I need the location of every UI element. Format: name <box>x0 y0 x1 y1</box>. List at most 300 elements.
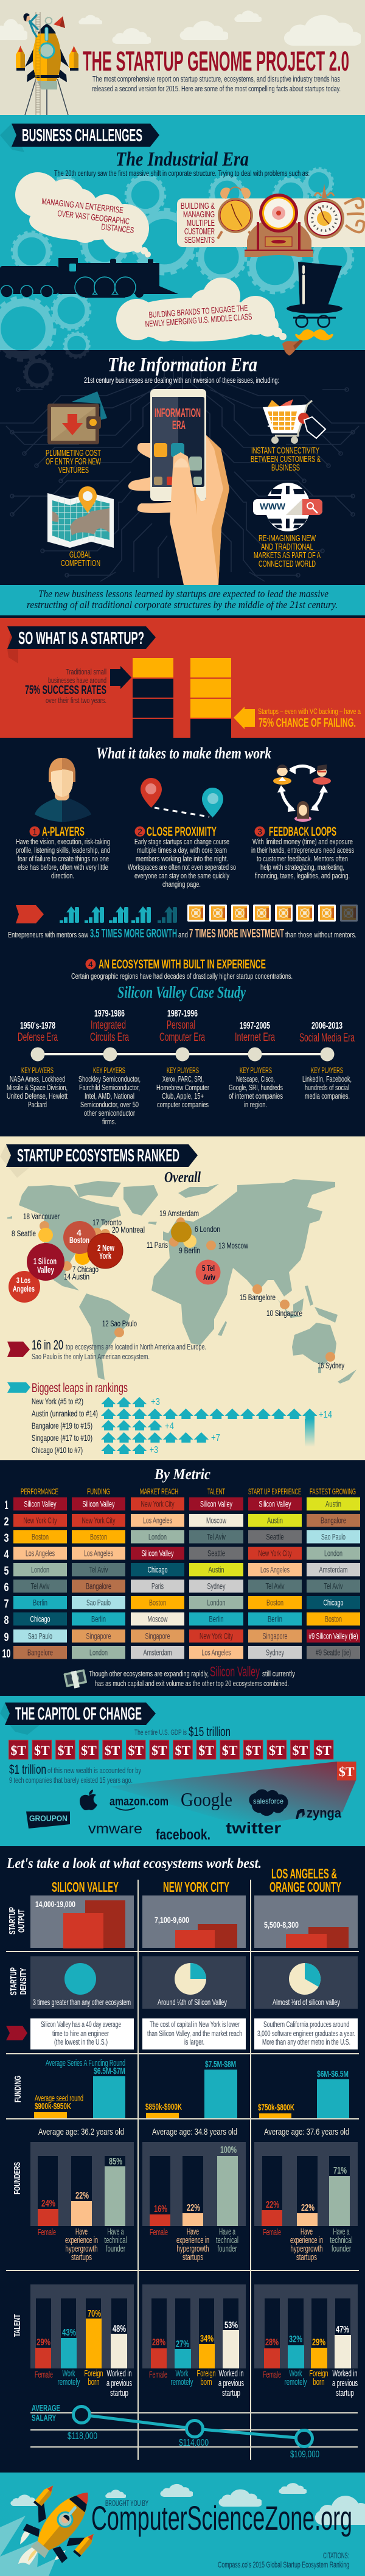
chart: silicon valley funding: Average Series A Funding Round <box>46 2058 125 2068</box>
key players: internet era: in region. <box>244 1100 267 1109</box>
table column: market reach: Singapore <box>145 1631 170 1641</box>
icon: globe with www search bar <box>253 483 322 531</box>
table column: funding: Sao Paulo <box>86 1597 111 1607</box>
chart: new york talent: 34% <box>200 2334 214 2344</box>
callout cloud: building brands: NEWLY EMERGING U.S. MIDDLE CLASS <box>145 312 252 329</box>
text: plummeting cost <box>46 448 102 475</box>
callout cloud: managing an enterprise: DISTANCES <box>101 222 134 235</box>
row label: founders: FOUNDERS <box>12 2162 23 2194</box>
banner: startup ecosystems ranked: STARTUP ECOSYSTEMS RANKED <box>17 1146 179 1166</box>
panel: silicon valley fact <box>30 2018 134 2049</box>
chart: silicon valley founders: 85% <box>109 2157 122 2167</box>
table column: start up experience: Sydney <box>266 1647 284 1657</box>
row label: startup output <box>7 1907 27 1934</box>
chart: los angeles talent: 29% <box>312 2337 325 2348</box>
heading: the information era <box>84 354 279 385</box>
key players: personal computer era <box>156 1065 209 1109</box>
table column: talent: London <box>207 1597 225 1607</box>
chart: los angeles talent: born <box>313 2377 325 2387</box>
heading: biggest leaps <box>7 1381 128 1395</box>
logo: facebook: facebook. <box>156 1827 210 1843</box>
chart: new york funding <box>145 2059 237 2118</box>
timeline era: personal computer: Computer Era <box>159 1031 205 1044</box>
chart: los angeles talent: 28% <box>265 2337 279 2348</box>
chart: silicon valley talent: 29% <box>36 2337 50 2348</box>
key players: integrated circuits era: Semiconductor, over 50 <box>80 1100 139 1109</box>
leap row: new york: New York (#5 to #2) <box>32 1396 83 1406</box>
map labels <box>12 1208 344 1370</box>
chart: new york founders: Have <box>187 2227 199 2237</box>
map labels: 15 Bangelore <box>240 1292 276 1302</box>
arrow: to traditional blocks <box>110 666 131 689</box>
table column: funding: Singapore <box>86 1631 111 1641</box>
icon: wallet with falling cost arrow <box>47 391 107 444</box>
table column: start up experience: Boston <box>266 1597 283 1607</box>
text: traditional small business success: businesses have around <box>48 676 106 685</box>
table column: market reach: Paris <box>151 1581 164 1591</box>
text: one trillion: 9 tech companies that barely existed 15 years ago. <box>9 1776 133 1785</box>
column: close proximity: CLOSE PROXIMITY <box>147 825 217 839</box>
footer credit: BROUGHT YOU BY <box>105 2498 148 2508</box>
chart: los angeles founders: Female <box>263 2227 281 2238</box>
row label: startup density: STARTUP <box>9 1967 19 1995</box>
panel: new york fact: is larger. <box>184 2037 204 2046</box>
top five bubble labels: Valley <box>37 1265 54 1275</box>
map labels: 16 Sydney <box>318 1360 344 1370</box>
top five bubble labels: Angeles <box>13 1284 35 1293</box>
timeline era: internet: 1997-2005 <box>240 1021 270 1031</box>
chart: los angeles founders <box>254 2142 358 2263</box>
table column: funding: Silicon Valley <box>83 1499 114 1508</box>
text: re-imagining new and traditional markets: CONNECTED WORLD <box>259 559 316 569</box>
highlighted trillion square <box>337 1762 356 1780</box>
chart: silicon valley funding: $6.5M-$7M <box>94 2066 125 2076</box>
heading: ecosystem with built in experience: 4 <box>88 959 93 969</box>
map labels: 8 Seattle <box>12 1228 36 1238</box>
table row numbers: 7 <box>4 1598 9 1611</box>
top five bubble labels: 3 Los <box>16 1275 30 1285</box>
chart: los angeles founders: 22% <box>266 2200 279 2210</box>
column: a-players: profile, listening skills, leadership, and <box>16 845 110 855</box>
table column: market reach: Silicon Valley <box>141 1549 174 1558</box>
logo: zynga: zynga <box>307 1805 342 1821</box>
banner: so what is a startup: SO WHAT IS A STARTUP? <box>18 629 144 648</box>
text: global competition <box>61 550 100 569</box>
key players: internet era: of internet companies <box>229 1091 283 1101</box>
table column: performance: Tel Aviv <box>30 1581 50 1591</box>
table column: start up experience: Seattle <box>266 1531 284 1541</box>
column heading: silicon valley: SILICON VALLEY <box>52 1879 119 1895</box>
table column: fastest growing: Austin <box>325 1499 341 1508</box>
panel: silicon valley fact: time to hire an engineer <box>52 2029 109 2038</box>
map labels: 17 Toronto <box>92 1217 122 1227</box>
chart: silicon valley talent: Worked in <box>107 2368 131 2379</box>
text: mentors stat: and <box>178 930 188 939</box>
chart: new york founders <box>142 2142 246 2263</box>
map city bubbles <box>9 1217 335 1362</box>
table row numbers: 6 <box>4 1581 9 1594</box>
callout cloud: managing an enterprise: MANAGING AN ENTERPRISE <box>41 196 124 215</box>
column: a-players: else has before, often with very little <box>18 863 108 872</box>
panel: los angeles fact <box>254 2018 358 2049</box>
key players: defense era: KEY PLAYERS <box>21 1065 54 1075</box>
row label: startup output: OUTPUT <box>16 1909 27 1933</box>
timeline era: integrated circuits <box>90 1009 129 1044</box>
panel: new york fact: than Silicon Valley, and the market reach <box>147 2029 242 2038</box>
top five bubble labels: 2 New <box>97 1243 114 1253</box>
leap row: austin: +14 <box>319 1410 332 1420</box>
banner: the capitol of change: THE CAPITOL OF CHANGE <box>15 1704 142 1724</box>
chart: silicon valley founders: hypergrowth <box>66 2244 97 2254</box>
chart: los angeles talent: 47% <box>336 2325 349 2335</box>
icon: close proximity pins <box>141 778 223 817</box>
chart: silicon valley output <box>30 1895 134 1948</box>
map labels: 6 London <box>195 1224 220 1234</box>
chart: new york founders: founder <box>218 2244 237 2254</box>
text: mentors stat: Entrepreneurs with mentors saw <box>8 930 88 939</box>
callout cloud: managing an enterprise <box>15 172 151 257</box>
chart: silicon valley talent <box>30 2284 134 2398</box>
callout: 16 in 20: top ecosystems are located in North America and Europe. <box>66 1342 206 1351</box>
table row numbers: 9 <box>4 1631 9 1644</box>
chart: new york talent: born <box>201 2377 212 2387</box>
row label: funding: FUNDING <box>13 2076 23 2102</box>
map labels: 11 Paris <box>147 1240 168 1250</box>
logo: groupon: GROUPON <box>29 1814 68 1823</box>
column: close proximity: 2 <box>137 827 142 836</box>
panel: new york fact: The cost of capital in New York is lower <box>150 2020 240 2029</box>
top five bubble labels: 4 <box>77 1228 82 1237</box>
logo: salesforce: salesforce <box>253 1797 283 1805</box>
table column: market reach: Boston <box>149 1597 166 1607</box>
table column: performance <box>13 1497 67 1659</box>
table column: market reach: New York City <box>141 1499 174 1508</box>
table row numbers: 10 <box>2 1648 11 1661</box>
chart: silicon valley talent: 70% <box>88 2309 101 2319</box>
chart: silicon valley talent: Work <box>62 2368 75 2379</box>
map heading: overall: Overall <box>164 1169 201 1186</box>
world map <box>7 1179 356 1384</box>
timeline era: defense: Defense Era <box>18 1031 58 1044</box>
key players: personal computer era: Club, Apple, 15+ <box>162 1091 204 1101</box>
chart: los angeles founders: founder <box>332 2244 351 2254</box>
arrow: to startup blocks <box>234 707 255 729</box>
table column: start up experience: Tel Aviv <box>265 1581 285 1591</box>
timeline era: personal computer <box>159 1009 205 1044</box>
chart: silicon valley output: 14,000-19,000 <box>35 1899 75 1909</box>
panel: silicon valley fact: (the lowest in the U.S.) <box>54 2037 108 2046</box>
logo: google: Google <box>181 1788 232 1810</box>
key players: integrated circuits era <box>78 1065 141 1126</box>
text: re-imagining new and traditional markets: AND TRADITIONAL <box>261 542 313 552</box>
heading: silicon valley case study: Silicon Valley Case Study <box>117 983 246 1001</box>
map labels: 18 Vancouver <box>23 1211 60 1221</box>
callout cloud: building brands: BUILDING BRANDS TO ENGAGE THE <box>148 303 248 320</box>
chart: new york founders: hypergrowth <box>176 2244 209 2254</box>
chart: new york output: 7,100-9,600 <box>155 1915 189 1925</box>
icon: money stack <box>63 1669 88 1689</box>
chart: new york talent: 53% <box>224 2320 238 2331</box>
callout: 16 in 20: Sao Paulo is the only Latin American ecosystem. <box>32 1352 150 1361</box>
table column: fastest growing: London <box>324 1549 342 1558</box>
leap row: austin <box>32 1409 332 1447</box>
chart: new york founders: Female <box>150 2227 168 2238</box>
callout cloud: building brands <box>116 278 287 341</box>
row label: startup density <box>9 1967 29 1995</box>
leap row: singapore: Singapore (#17 to #10) <box>32 1433 92 1443</box>
logo: amazon: amazon.com <box>109 1795 169 1808</box>
heading: biggest leaps: Biggest leaps in rankings <box>32 1381 128 1395</box>
chart: los angeles output <box>254 1895 358 1948</box>
panel: silicon valley density: 3 times greater than any other ecosystem <box>33 1997 131 2007</box>
key players: integrated circuits era: Intel, AMD, National <box>85 1091 134 1101</box>
top five bubble labels: Boston <box>69 1235 89 1245</box>
chart: los angeles founders: 22% <box>301 2203 315 2213</box>
column: a-players: Have the vision, execution, risk-taking <box>16 837 110 846</box>
map labels: 19 Amsterdam <box>159 1208 199 1218</box>
column: feedback loops: 3 <box>257 827 262 836</box>
wedge from highlighted square to logos <box>109 1762 356 1826</box>
table column: performance: Bangelore <box>27 1647 53 1657</box>
chart: new york founders: Have a <box>219 2227 236 2237</box>
table column: fastest growing: Tel Aviv <box>324 1581 343 1591</box>
column: close proximity: multiple times a day, with core team <box>137 845 227 855</box>
chart: new york founders: 100% <box>220 2145 237 2155</box>
table column headers <box>21 1486 356 1496</box>
banner: business challenges <box>0 124 159 152</box>
key players: internet era: KEY PLAYERS <box>240 1065 272 1075</box>
table column: talent: Tel Aviv <box>207 1531 226 1541</box>
map labels: 7 Chicago <box>72 1264 99 1274</box>
heading: by metric: By Metric <box>154 1466 210 1483</box>
chart: silicon valley funding <box>34 2058 125 2118</box>
table column: start up experience: New York City <box>258 1549 292 1558</box>
chart: los angeles talent: remotely <box>285 2377 307 2387</box>
table column: talent: Seattle <box>207 1549 225 1558</box>
chart: new york founders: startups <box>182 2253 203 2263</box>
table column: market reach: London <box>148 1531 167 1541</box>
chart: silicon valley founders: Have <box>75 2227 88 2237</box>
table column: performance: Los Angeles <box>26 1549 55 1558</box>
band text: new business lessons <box>27 588 338 611</box>
map labels: 12 Sao Paulo <box>102 1318 137 1328</box>
table column: fastest growing: Bangalore <box>321 1516 346 1525</box>
chart: silicon valley talent: 48% <box>113 2324 126 2334</box>
icon: top hat, glasses, moustache and pipe <box>282 262 342 355</box>
text: us gdp: $15 trillion <box>189 1725 231 1739</box>
footer clouds <box>10 2483 365 2525</box>
text: silicon valley capital: still currently <box>262 1669 295 1678</box>
table column: performance: London <box>31 1564 49 1574</box>
leap row: singapore: +7 <box>211 1433 220 1443</box>
chart: new york founders: technical <box>216 2236 238 2245</box>
chart: new york founders: experience in <box>176 2236 209 2245</box>
timeline era: personal computer: 1987-1996 <box>167 1009 198 1019</box>
panel: new york density <box>142 1956 246 2009</box>
table column: talent: Austin <box>208 1564 224 1574</box>
table column: funding: Boston <box>90 1531 107 1541</box>
chart: silicon valley talent: a previous <box>106 2378 132 2389</box>
chart: silicon valley talent: remotely <box>57 2377 80 2387</box>
text: average founder ages <box>38 2127 349 2137</box>
callout cloud: managing an enterprise: OVER VAST GEOGRAPHIC <box>57 208 130 226</box>
leap row: bangalore: Bangalore (#19 to #15) <box>32 1421 92 1430</box>
table column: performance: Chicago <box>30 1614 50 1624</box>
table column: market reach: Moscow <box>147 1614 168 1624</box>
table column: start up experience: Los Angeles <box>260 1564 290 1574</box>
text: traditional small business success: over their first two years. <box>46 696 106 705</box>
text: one trillion: $1 trillion <box>9 1763 46 1777</box>
top five bubble labels: 1 Silicon <box>33 1256 57 1267</box>
leap row: chicago <box>32 1444 158 1455</box>
leap row: chicago: +3 <box>150 1445 158 1455</box>
chart: silicon valley founders <box>30 2142 134 2263</box>
panel: building and managing customer segments: BUILDING & <box>181 201 215 211</box>
chart: los angeles founders: Have a <box>333 2227 350 2237</box>
key players: integrated circuits era: other semiconductor <box>84 1108 135 1118</box>
citations <box>218 2550 349 2569</box>
table column: performance: Silicon Valley <box>24 1499 56 1508</box>
banner: business challenges: BUSINESS CHALLENGES <box>22 126 142 145</box>
timeline era: integrated circuits: Circuits Era <box>90 1031 129 1044</box>
chart: new york talent: a previous <box>218 2378 244 2389</box>
text: us gdp: The entire U.S. GDP is <box>134 1728 187 1737</box>
chart: los angeles talent: Foreign <box>309 2368 328 2379</box>
logo: salesforce <box>249 1790 288 1816</box>
table column: funding: Tel Aviv <box>89 1564 108 1574</box>
column: a-players: direction. <box>51 871 74 880</box>
logo: twitter: twitter <box>226 1819 281 1837</box>
text: startup failure <box>258 707 361 730</box>
table column: talent <box>189 1497 243 1659</box>
table column headers: TALENT <box>207 1486 225 1496</box>
text: instant connectivity: BETWEEN CUSTOMERS & <box>251 454 321 464</box>
table column: market reach: Los Angeles <box>143 1516 172 1525</box>
chart: new york talent: Worked in <box>219 2368 243 2379</box>
chart: silicon valley founders: Female <box>38 2227 56 2238</box>
table column: performance: Boston <box>32 1531 49 1541</box>
banner: startup ecosystems ranked <box>0 1144 198 1178</box>
leap row: bangalore <box>32 1420 174 1432</box>
key players: personal computer era: Homebrew Computer <box>156 1083 209 1092</box>
icon: alarm clock <box>218 187 253 239</box>
table column: start up experience: Berlin <box>268 1614 282 1624</box>
column: feedback loops <box>251 825 354 880</box>
timeline era: defense: 1950's-1978 <box>20 1021 55 1031</box>
key players: defense era: United Defense, Hewlett <box>7 1091 68 1101</box>
text: silicon valley capital: Though other ecosystems are expanding rapidly, <box>89 1669 209 1678</box>
table column: funding: Berlin <box>91 1614 106 1624</box>
text: instant connectivity: BUSINESS <box>271 463 300 473</box>
table column: fastest growing: Chicago <box>324 1597 344 1607</box>
text: global competition: GLOBAL <box>69 550 91 560</box>
table column: talent: New York City <box>200 1631 233 1641</box>
leap row: singapore <box>32 1432 220 1443</box>
column: close proximity: members working late into the night. <box>136 854 228 863</box>
chart: new york talent: Work <box>175 2368 189 2379</box>
chart: los angeles talent: 32% <box>289 2334 302 2345</box>
logo: apple <box>80 1790 97 1810</box>
band text: new business lessons: The new business lessons learned by startups are expected to lead the massive <box>38 588 328 600</box>
chart: average salary line: $114,000 <box>179 2438 209 2448</box>
arrow: chevron for facts row <box>6 2026 27 2040</box>
table row numbers: 8 <box>4 1614 9 1627</box>
chart: average salary line: AVERAGE <box>32 2403 60 2413</box>
panel: silicon valley fact: Silicon Valley has a 40 day average <box>41 2020 121 2029</box>
panel: silicon valley density <box>30 1956 134 2009</box>
chart: los angeles talent <box>254 2284 358 2398</box>
icon: globe with www search bar: WWW <box>260 502 286 512</box>
key players: internet era <box>229 1065 283 1109</box>
map labels: 10 Singapore <box>266 1308 302 1318</box>
timeline era: social media <box>299 1021 355 1045</box>
chart: new york talent: Female <box>149 2370 167 2380</box>
comparison grid lines <box>6 1880 359 2460</box>
chart: los angeles talent: startup <box>336 2388 354 2398</box>
key players: defense era: Missile & Space Division, <box>7 1083 68 1092</box>
leap row: bangalore: +4 <box>165 1421 174 1432</box>
arrow: mentors chevron <box>16 905 44 923</box>
leap row: new york <box>32 1396 160 1407</box>
chart: new york talent: 27% <box>176 2339 189 2350</box>
banner: the capitol of change <box>0 1703 156 1735</box>
text: global competition: COMPETITION <box>61 558 100 569</box>
banner: so what is a startup <box>7 626 156 663</box>
table column: funding: Los Angeles <box>84 1549 113 1558</box>
table column: performance: Berlin <box>33 1597 47 1607</box>
chart: new york talent: 28% <box>152 2337 165 2348</box>
chart: silicon valley founders: experience in <box>65 2236 98 2245</box>
key players: integrated circuits era: KEY PLAYERS <box>93 1065 125 1075</box>
chart: average salary line <box>30 2403 358 2460</box>
row label: talent: TALENT <box>12 2314 23 2337</box>
column: close proximity <box>128 825 236 889</box>
heading: the industrial era <box>54 149 310 178</box>
chart: silicon valley talent: born <box>88 2377 100 2387</box>
timeline <box>30 1047 335 1062</box>
table column: talent: Moscow <box>206 1516 227 1525</box>
table column headers: MARKET REACH <box>140 1486 178 1496</box>
icon: rocket on launch pad <box>16 12 78 115</box>
highlighted trillion square: $T <box>339 1764 355 1779</box>
table row numbers: 2 <box>4 1516 9 1528</box>
logo: vmware: vmware <box>88 1821 142 1836</box>
icon: hand holding smartphone: INFORMATION <box>155 407 201 420</box>
timeline era: social media: 2006-2013 <box>311 1021 342 1031</box>
leap row: chicago: Chicago (#10 to #7) <box>32 1445 83 1455</box>
table row numbers: 5 <box>4 1565 9 1578</box>
chart: los angeles funding: $6M-$6.5M <box>317 2069 349 2079</box>
text: instant connectivity <box>251 446 321 473</box>
table column: fastest growing: Sao Paulo <box>321 1531 346 1541</box>
chart: silicon valley funding: Average seed round <box>35 2093 83 2104</box>
heading: what ecosystems work best: Let's take a look at what ecosystems work best. <box>6 1856 262 1872</box>
column: a-players <box>16 825 110 880</box>
header clouds <box>0 10 363 46</box>
chart: new york founders: 22% <box>187 2203 200 2213</box>
key players: personal computer era: Xerox, PARC, SRI, <box>162 1074 204 1083</box>
map labels: 9 Berlin <box>179 1245 200 1255</box>
chart: los angeles founders: hypergrowth <box>291 2244 322 2254</box>
chart: los angeles founders: startups <box>296 2253 317 2263</box>
key players: integrated circuits era: Shockley Semiconductor, <box>78 1074 141 1083</box>
table column: performance: New York City <box>23 1516 57 1525</box>
callout: 16 in 20: 16 in 20 <box>32 1337 63 1353</box>
background circuit pattern <box>0 356 365 581</box>
column: close proximity: Workspaces are often not even seperated so <box>128 863 236 872</box>
top five bubble labels: 5 Tel <box>202 1263 215 1273</box>
panel: new york fact <box>142 2018 246 2049</box>
